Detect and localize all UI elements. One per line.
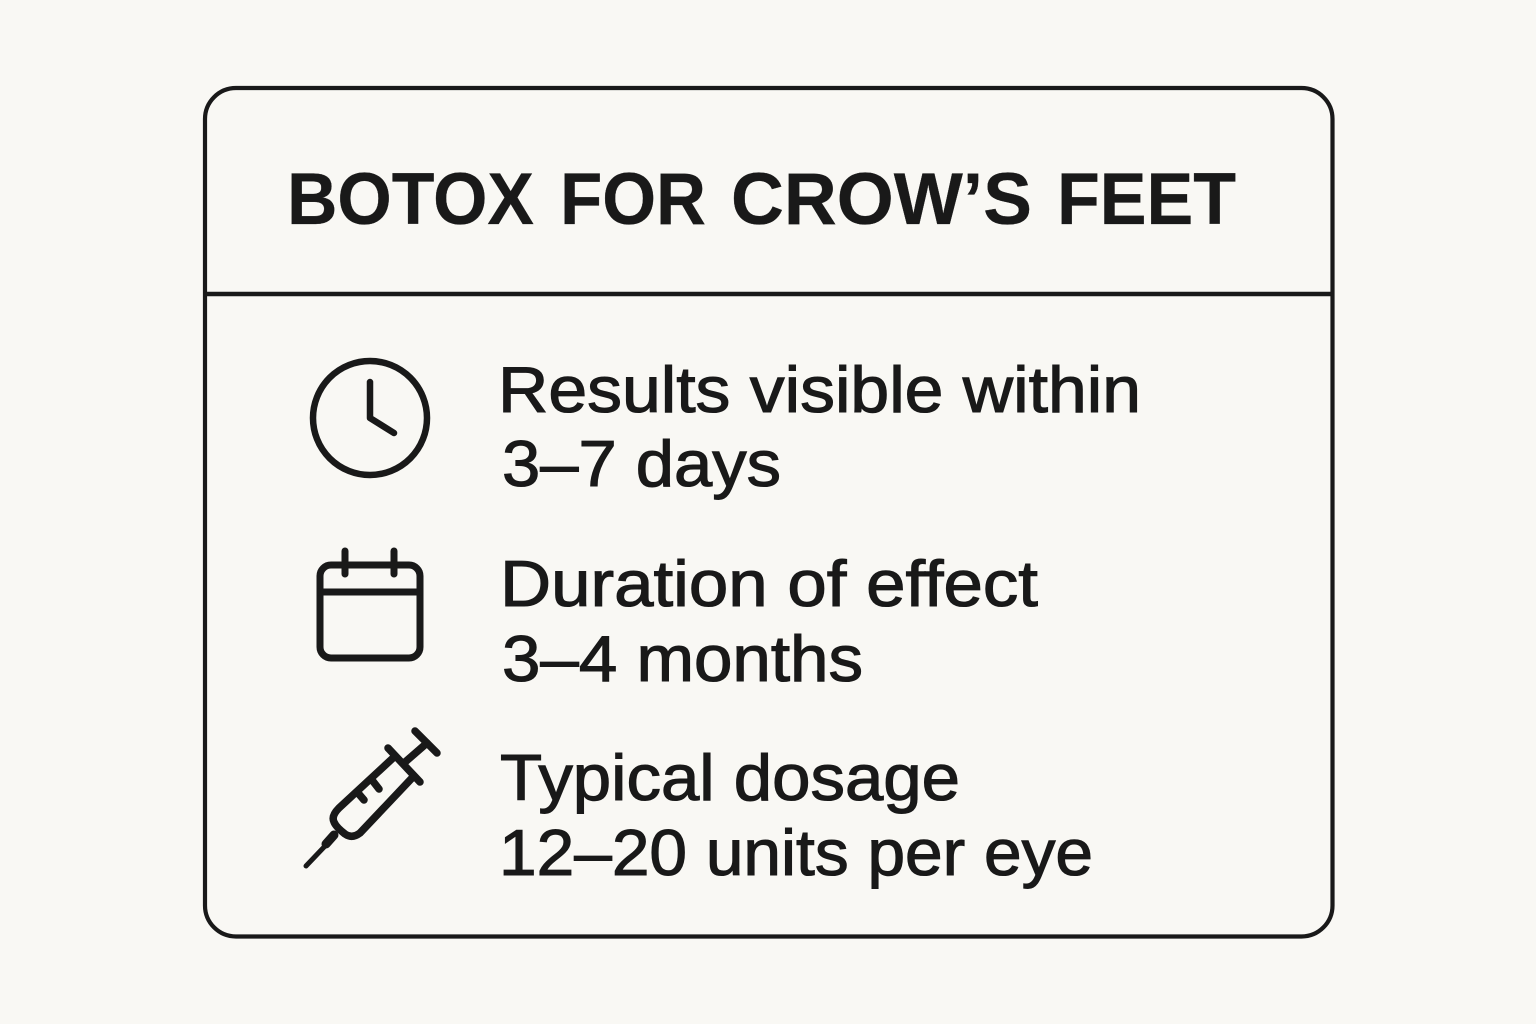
- text: results visible within 3–7 days: Results visible within: [498, 353, 1141, 426]
- text: typical dosage 12–20 units per eye: [499, 741, 1093, 889]
- icon: calendar: [320, 551, 420, 658]
- title: FOR: [560, 157, 706, 240]
- title: [287, 157, 1236, 240]
- text: typical dosage 12–20 units per eye: 12–20 units per eye: [499, 816, 1093, 889]
- title: BOTOX: [287, 157, 534, 240]
- icon: syringe: [306, 731, 437, 866]
- panel: info card: [205, 88, 1332, 936]
- text: results visible within 3–7 days: 3–7 days: [502, 427, 781, 500]
- text: duration of effect 3–4 months: Duration of effect: [500, 547, 1038, 620]
- row: results timing: [313, 353, 1141, 500]
- row: duration of effect: [320, 547, 1038, 695]
- text: duration of effect 3–4 months: [500, 547, 1038, 695]
- text: typical dosage 12–20 units per eye: Typical dosage: [500, 741, 960, 814]
- title: CROW’S: [731, 157, 1032, 240]
- text: duration of effect 3–4 months: 3–4 months: [502, 622, 863, 695]
- text: results visible within 3–7 days: [498, 353, 1141, 500]
- title: FEET: [1057, 157, 1236, 240]
- row: typical dosage: [306, 731, 1093, 889]
- icon: clock: [313, 361, 427, 475]
